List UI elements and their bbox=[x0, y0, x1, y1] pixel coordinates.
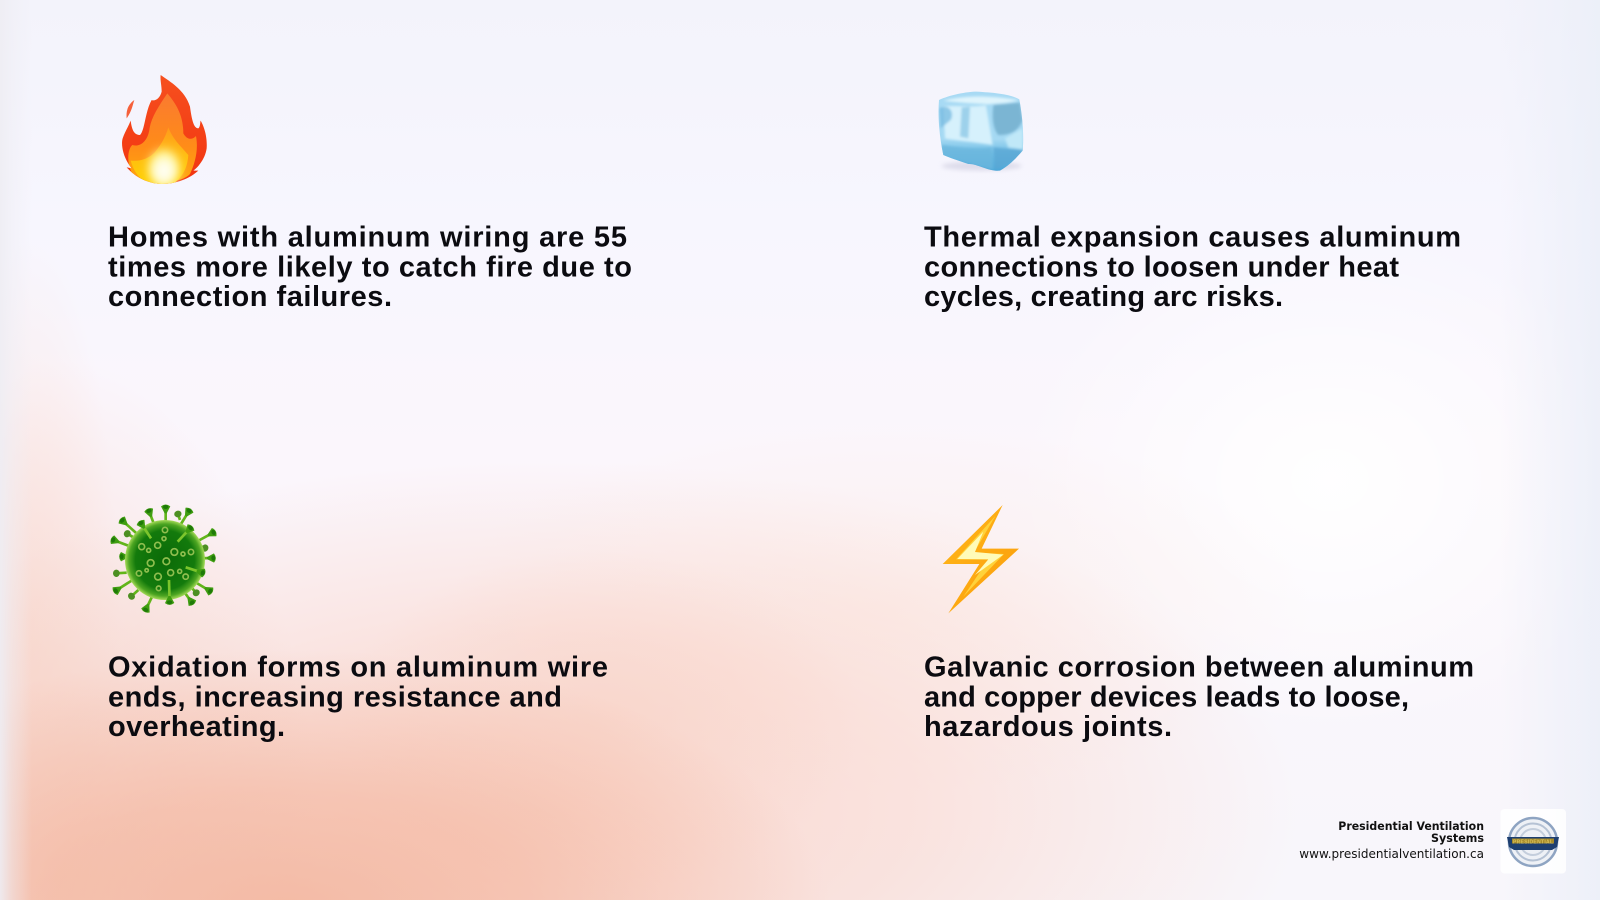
icon: virus bbox=[112, 505, 215, 611]
text: fire statistic: times more likely to catch fire due to bbox=[108, 252, 632, 284]
icon: fire bbox=[122, 75, 207, 187]
text: oxidation: Oxidation forms on aluminum wire bbox=[108, 652, 608, 684]
website url: www.presidentialventilation.ca bbox=[1299, 846, 1484, 861]
panel: thermal expansion bbox=[924, 92, 1461, 313]
icon: lightning bolt bbox=[943, 505, 1019, 613]
text: galvanic corrosion: and copper devices leads to loose, bbox=[924, 682, 1409, 714]
icon: ice cube bbox=[939, 92, 1023, 171]
text: oxidation: overheating. bbox=[108, 711, 285, 743]
panel: oxidation bbox=[108, 505, 608, 743]
text: thermal expansion: Thermal expansion causes aluminum bbox=[924, 222, 1461, 254]
text: fire statistic: connection failures. bbox=[108, 281, 392, 313]
text: thermal expansion: connections to loosen under heat bbox=[924, 252, 1399, 284]
company name: Presidential Ventilation bbox=[1338, 819, 1484, 833]
text: fire statistic: Homes with aluminum wiring are 55 bbox=[108, 222, 627, 254]
text: oxidation: ends, increasing resistance and bbox=[108, 682, 562, 714]
logo card bbox=[1500, 809, 1566, 874]
logo card: PRESIDENTIAL bbox=[1513, 839, 1553, 845]
panel: fire risk bbox=[108, 75, 632, 313]
text: galvanic corrosion: Galvanic corrosion between aluminum bbox=[924, 652, 1474, 684]
text: galvanic corrosion: hazardous joints. bbox=[924, 711, 1172, 743]
footer: company branding bbox=[1299, 809, 1566, 874]
company name: Systems bbox=[1431, 831, 1484, 845]
panel: galvanic corrosion bbox=[924, 505, 1474, 743]
text: thermal expansion: cycles, creating arc risks. bbox=[924, 281, 1283, 313]
